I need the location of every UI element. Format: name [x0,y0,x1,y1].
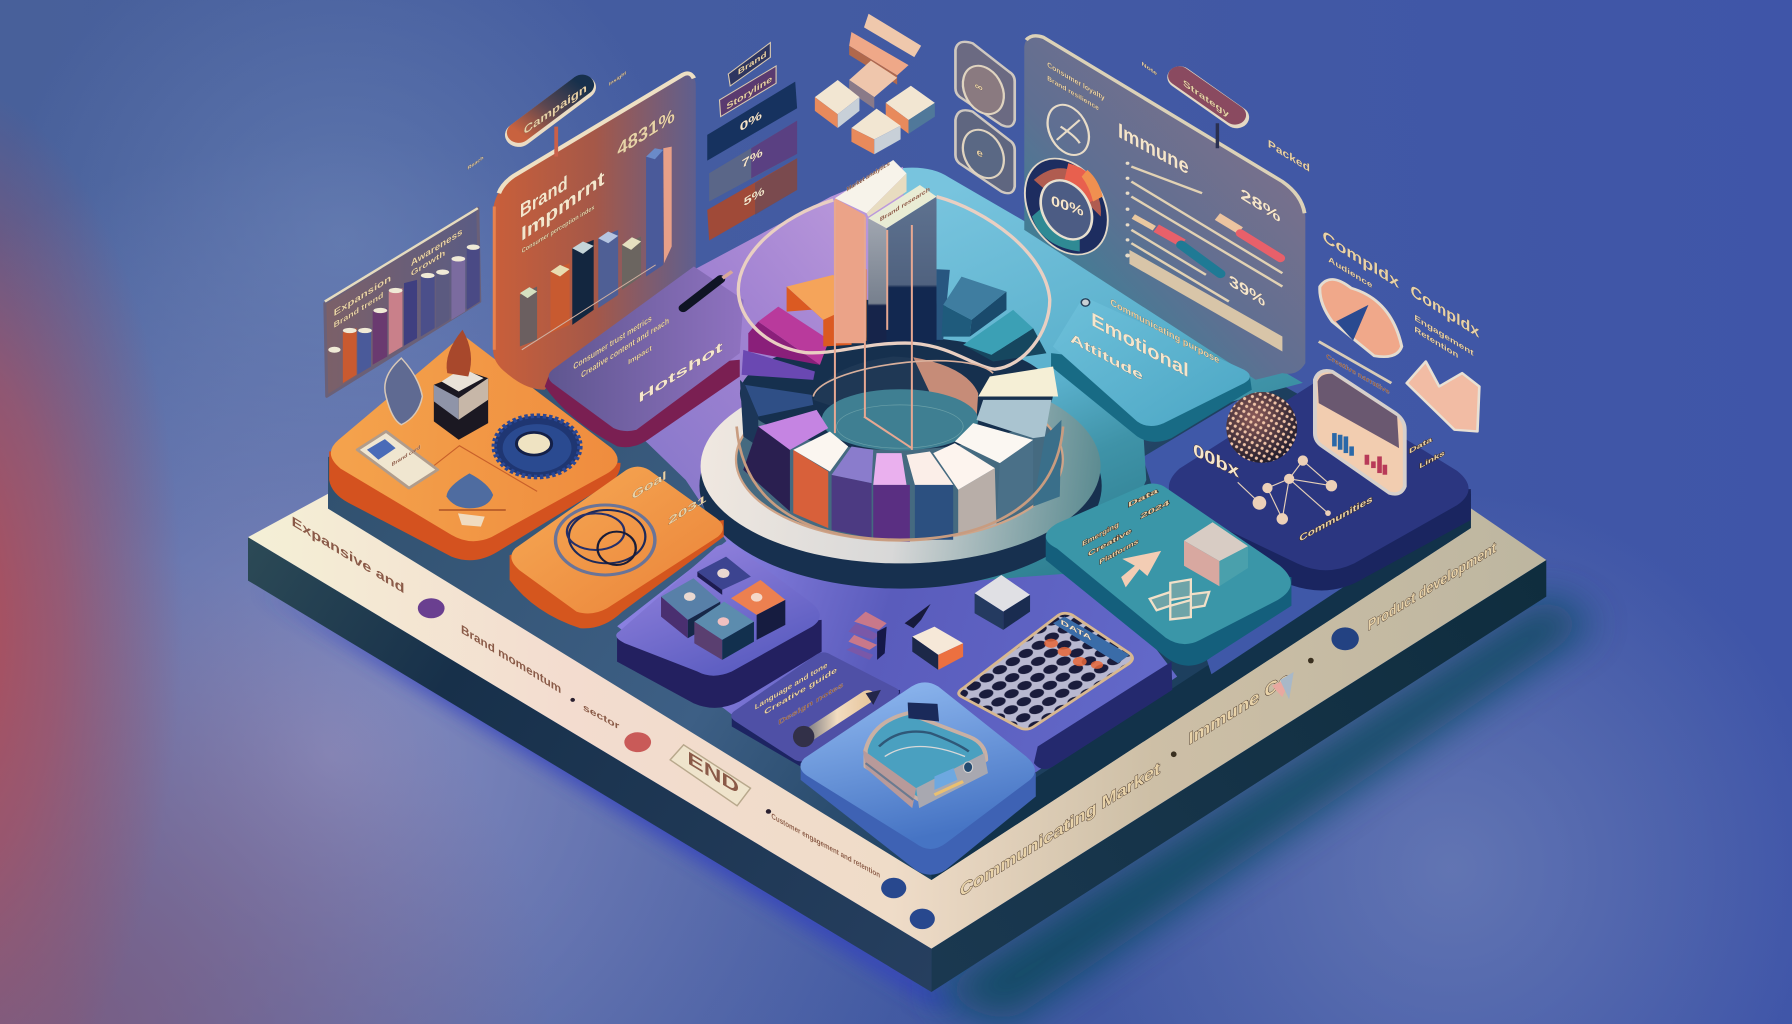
calculator card: DATA [1061,618,1092,642]
brand title: Brand [520,171,568,222]
icon: linked circle [1040,100,1096,160]
navy block labels: Data [1409,434,1433,456]
left floating bar chart panel [325,208,480,396]
teal block contents: Creative [1088,526,1131,558]
front segments [743,367,1061,541]
cube A [815,80,859,128]
sphere [1226,392,1297,463]
progress lines [1131,167,1282,301]
base labels [292,514,771,814]
tag navy: 0% [740,108,762,134]
orange block small: Goal [632,468,666,503]
brand impact panel [493,73,696,390]
immune dashboard panel: 39% [1229,271,1265,310]
network nodes [1238,455,1337,525]
base labels: Expansive and [292,514,404,597]
tag slate [709,121,797,202]
end tile [670,745,751,806]
teal block contents [1082,485,1248,619]
dashboard window card [1315,371,1405,494]
light blue ring card [800,682,1036,875]
donut chart with bars [737,160,1063,541]
stacked icon tiles [955,42,1015,193]
label one: Compldx [1323,226,1399,292]
tag slate: 7% [742,145,763,171]
brand impact panel: Consumer perception index [522,203,595,255]
cube C [851,109,901,154]
cube white [975,575,1030,630]
teal block contents: Data [1128,485,1160,509]
tag two: Storyline [726,74,773,112]
left floating bar chart panel: Growth [411,248,445,279]
brand impact panel: Impmrnt [521,166,605,246]
purple text card [545,267,744,447]
left floating bar chart panel: Brand trend [334,290,384,331]
teal text card: Emotional [1091,308,1189,382]
pen [683,272,732,308]
floating pill right [1142,61,1310,175]
back segments [740,269,1046,447]
tall bar two [868,185,937,343]
teal block contents: 2024 [1141,498,1169,521]
orange block contents [357,330,580,488]
arrow icon [1121,551,1161,587]
dot navy one [881,878,906,898]
purple text card: Creative content and reach [581,316,669,381]
right base labels [960,538,1496,901]
tier plate [328,171,1471,880]
tag one: Brand [738,49,767,77]
icon: gear [494,416,580,477]
indigo text card: Design notes [778,680,844,727]
icon: business card [357,431,438,488]
cube teal [694,602,754,660]
right base labels: Immune Co [1189,667,1289,749]
gauge donut [1009,148,1123,265]
base platform [248,229,1594,1024]
immune dashboard panel [1009,36,1305,380]
cube B [886,86,935,134]
floating pill right: Strategy [1183,78,1229,120]
floating pill right: Packed [1268,137,1310,175]
tall bar one: Market analytics [847,160,890,193]
icon: pie card [1320,279,1402,357]
tag two [719,66,776,117]
tall bar one [835,160,907,343]
strip top [864,14,921,57]
teal text card: Attitude [1070,331,1143,384]
icon tile two [955,110,1015,193]
small captions: Consumer loyalty [1047,60,1105,102]
orange block small [510,467,724,628]
periwinkle surface [617,537,1177,851]
value labels: 28% [1240,185,1280,226]
navy block labels: 00bx [1193,440,1239,481]
immune dashboard panel: Brand resilience [1047,74,1099,113]
teal text card: Communicating purpose [1110,297,1219,366]
cube purple [697,557,751,595]
right base labels: Communicating Market [960,758,1160,901]
floating pill right: Note [1142,61,1157,78]
teal block [1046,484,1291,666]
tag rust [707,158,797,241]
icon: business card: Brand card [392,444,421,468]
divider with caption: Creative narrative [1326,352,1390,396]
stripe stack [846,612,887,660]
large periwinkle card side [1034,662,1172,769]
wire ring [738,197,1050,369]
tile centre [849,61,897,97]
small purple block with cubes [616,544,822,708]
purple text card: Hotshot [638,339,724,406]
floating pill left: Reach [467,155,484,172]
floating tag stack [707,43,797,241]
immune title: Immune [1118,119,1189,180]
icon tile one: ∞ [975,80,983,94]
strip mid [849,32,909,75]
navy block labels [1193,434,1445,545]
purple text card: Impact [628,343,652,366]
label two: Retention [1414,325,1459,361]
brand bars [520,147,672,350]
indigo text card: Language and tone [755,660,828,712]
percent value: 4831% [617,104,675,161]
left floating bar chart panel: Awareness [411,227,463,269]
base caption lower: Customer engagement and retention [771,811,880,880]
right base labels: Product development [1368,538,1496,635]
purple upper surface [549,167,914,571]
central disc [699,369,1102,589]
dot red [624,732,651,752]
floating pill left: Campaign [524,81,587,137]
base labels: sector [583,702,620,733]
bars [328,245,480,383]
gauge donut: 00% [1051,193,1084,220]
dot purple [418,598,445,618]
indigo text card: Creative guide [764,665,837,717]
base labels: Brand momentum [461,622,561,697]
indigo text card [731,652,900,767]
wedge block [905,604,963,670]
teal block captions: Emerging [1082,520,1119,548]
end tile: END [687,747,739,799]
navy block labels: Communities [1299,494,1373,545]
teal upper surface [903,168,1303,597]
floating pill left: Insight [609,71,626,88]
icon: small shield leaf [439,473,506,527]
tag rust: 5% [744,184,765,209]
panel captions: Expansion [334,273,391,319]
purple text card: Consumer trust metrics [573,314,652,372]
front rim [737,427,1063,540]
tag one [728,43,770,86]
donut shell [740,337,1053,450]
orange block large [329,335,621,560]
navy block labels: Links [1419,448,1445,470]
hole wall and floor [813,357,978,451]
cube icon [1184,522,1248,586]
orange block small: 2031 [668,491,707,527]
teal text card [1051,296,1252,442]
icon: chevron shape [1407,361,1479,431]
label one: Audience [1328,255,1372,291]
calculator card [959,613,1132,729]
inner ring arc [813,361,993,397]
icon: cable loops [555,505,655,575]
icon: leaf [385,358,422,425]
floating complex labels and shapes [1319,226,1479,431]
tall bar two: Brand research [880,186,930,223]
label two: Compldx [1411,281,1479,341]
floating isometric tiles [815,14,935,154]
ring icon [863,703,988,808]
label two: Engagement [1414,313,1474,359]
icon: ink bottle [434,330,488,440]
cross icon [1150,579,1209,619]
icon tile two: e [976,147,983,160]
cube blue [661,578,720,638]
small isometric objects [846,575,1030,670]
navy block [1168,383,1471,590]
dot navy two [910,909,935,929]
floating pill left [467,71,626,172]
tag navy [707,82,797,161]
cube orange [731,580,785,640]
pencil icon [793,690,881,747]
teal block contents: Platforms [1099,537,1138,566]
vertical lines [835,200,912,450]
icon tile one [955,42,1015,127]
